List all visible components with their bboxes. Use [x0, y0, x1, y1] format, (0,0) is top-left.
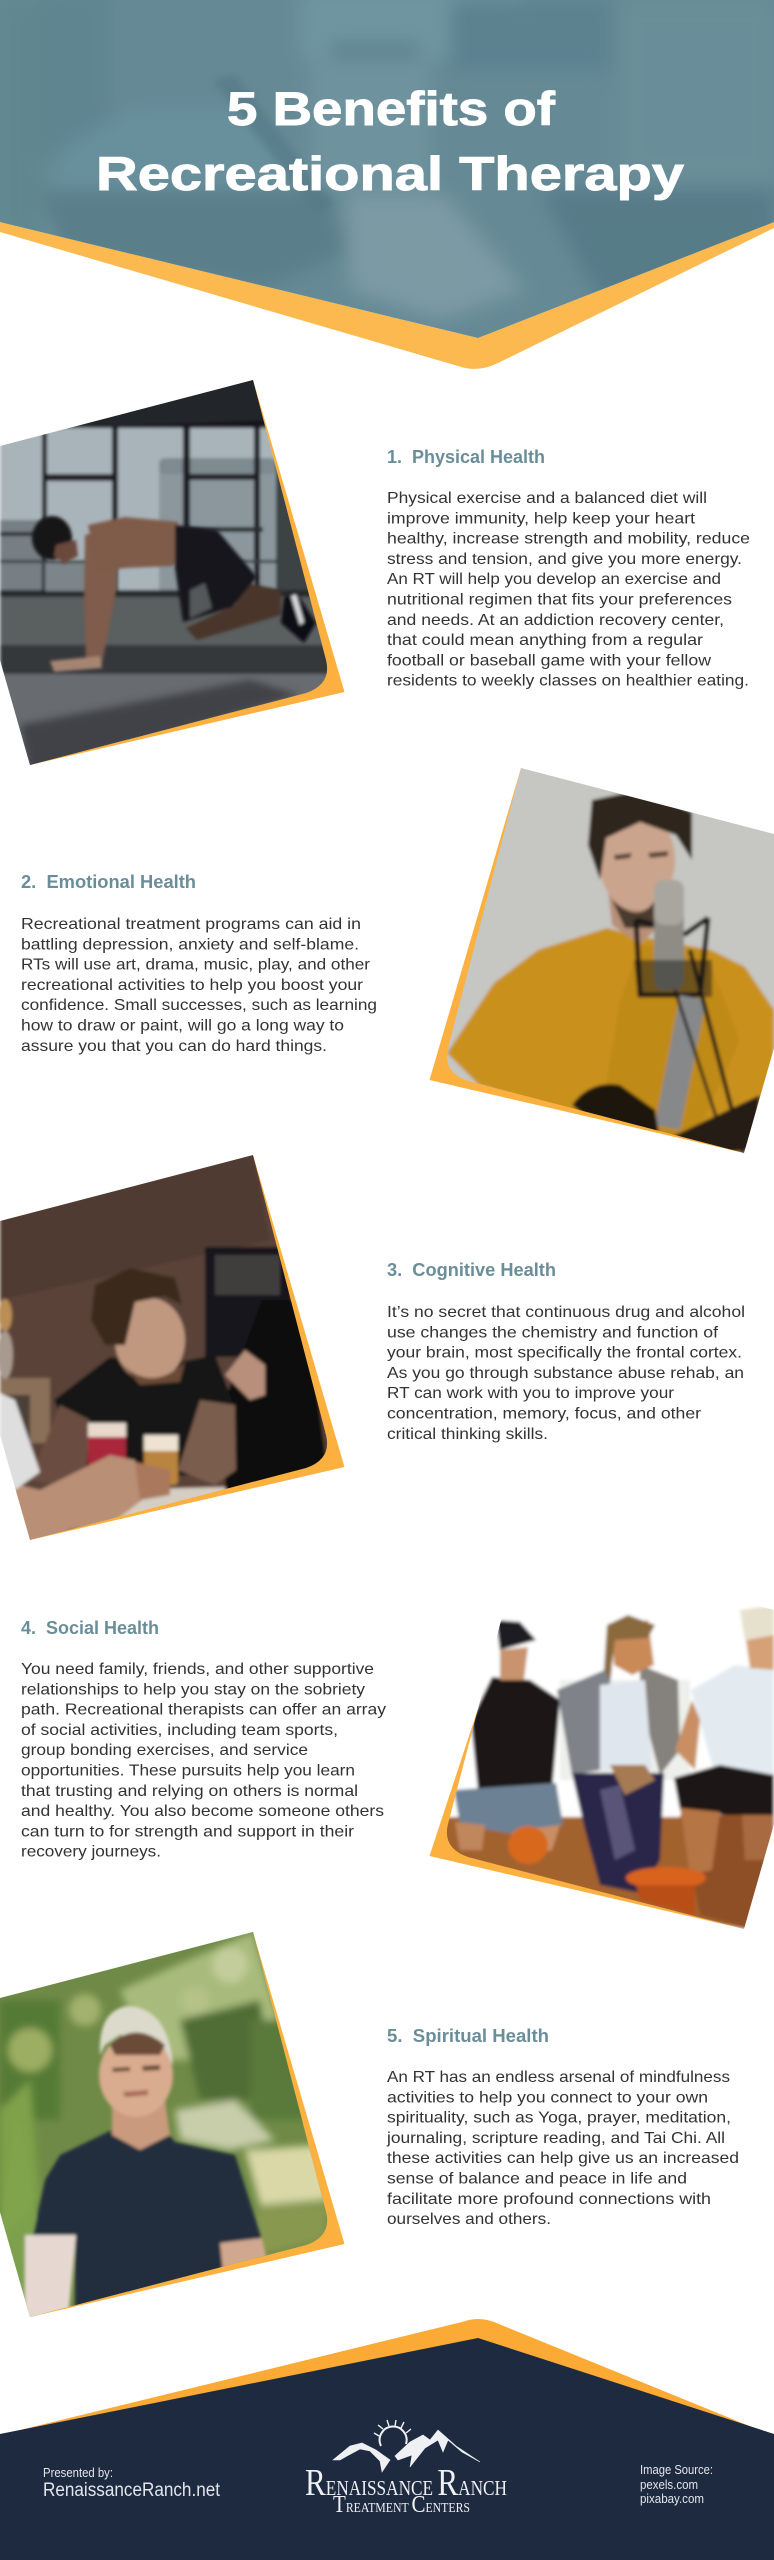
- text: cognitive health body: It’s no secret that continuous drug and alcohol: [387, 1304, 745, 1321]
- text: physical health body: Physical exercise and a balanced diet will: [387, 490, 707, 507]
- text: emotional health body: how to draw or paint, will go a long way to: [21, 1018, 344, 1034]
- footer orange chevron: [20, 2319, 774, 2436]
- text: spiritual health body: journaling, scripture reading, and Tai Chi. All: [386, 2130, 725, 2147]
- image sources: pixabay.com: [640, 2491, 704, 2506]
- header teal photo background: [0, 0, 774, 345]
- text: social health body: group bonding exercises, and service: [21, 1742, 308, 1759]
- heading: social health: 4. Social Health: [21, 1617, 159, 1638]
- text: emotional health body: RTs will use art, drama, music, play, and other: [21, 957, 370, 974]
- text: social health body: path. Recreational therapists can offer an array: [21, 1702, 386, 1719]
- logo: renaissance ranch treatment centers: RENAISSANCE RANCH: [305, 2462, 507, 2504]
- footer: [0, 2319, 774, 2560]
- text: cognitive health body: your brain, most specifically the frontal cortex.: [387, 1345, 742, 1362]
- text: social health body: relationships to help you stay on the sobriety: [21, 1681, 365, 1698]
- text: physical health body: football or baseball game with your fellow: [387, 652, 712, 669]
- heading: cognitive health: 3. Cognitive Health: [387, 1259, 556, 1280]
- icon: mountains and sun: [333, 2420, 480, 2472]
- image sources: Image Source:: [640, 2462, 713, 2477]
- text: spiritual health body: these activities can help give us an increased: [387, 2150, 739, 2167]
- photo: three friends sitting on a wall: [430, 1606, 774, 1929]
- text: emotional health body: assure you that you can do hard things.: [21, 1038, 327, 1055]
- section 1: physical health: [0, 370, 750, 775]
- heading: physical health: 1. Physical Health: [387, 446, 545, 467]
- section 2: emotional health: [21, 760, 774, 1160]
- text: emotional health body: [21, 916, 377, 1055]
- text: physical health body: An RT will help you develop an exercise and: [387, 571, 721, 588]
- text: physical health body: and needs. At an addiction recovery center,: [387, 612, 724, 629]
- presented by: Presented by:: [43, 2465, 113, 2480]
- photo: man exercising: [0, 370, 344, 775]
- title: [96, 82, 684, 200]
- text: physical health body: [387, 490, 750, 690]
- text: spiritual health body: [386, 2069, 739, 2228]
- text: physical health body: residents to weekly classes on healthier eating.: [387, 673, 749, 690]
- text: spiritual health body: An RT has an endless arsenal of mindfulness: [387, 2069, 730, 2086]
- text: cognitive health body: RT can work with you to improve your: [387, 1385, 674, 1402]
- text: spiritual health body: sense of balance and peace in life and: [387, 2170, 687, 2188]
- text: cognitive health body: use changes the chemistry and function of: [387, 1324, 719, 1341]
- text: social health body: and healthy. You also become someone others: [21, 1803, 384, 1820]
- heading: emotional health: 2. Emotional Health: [21, 871, 196, 892]
- section 5: spiritual health: [0, 1925, 739, 2325]
- text: physical health body: nutritional regimen that fits your preferences: [387, 592, 732, 608]
- text: emotional health body: Recreational treatment programs can aid in: [21, 916, 361, 933]
- section 4: social health: [21, 1606, 774, 1929]
- section 3: cognitive health: [0, 1150, 745, 1550]
- text: spiritual health body: spirituality, such as Yoga, prayer, meditation,: [387, 2110, 731, 2127]
- text: social health body: [21, 1661, 386, 1861]
- text: physical health body: stress and tension, and give you more energy.: [387, 551, 742, 568]
- text: physical health body: healthy, increase strength and mobility, reduce: [387, 531, 750, 548]
- title: 5 Benefits of: [227, 82, 555, 135]
- text: emotional health body: confidence. Small successes, such as learning: [21, 997, 377, 1014]
- title: Recreational Therapy: [96, 147, 684, 200]
- text: social health body: You need family, friends, and other supportive: [21, 1661, 374, 1678]
- text: emotional health body: recreational activities to help you boost your: [21, 977, 363, 994]
- presented by: RenaissanceRanch.net: [43, 2480, 221, 2501]
- text: social health body: recovery journeys.: [21, 1844, 161, 1861]
- header orange chevron: [0, 222, 774, 369]
- text: physical health body: improve immunity, help keep your heart: [387, 510, 696, 527]
- text: spiritual health body: facilitate more profound connections with: [387, 2191, 711, 2208]
- text: social health body: that trusting and relying on others is normal: [21, 1783, 358, 1800]
- text: social health body: can turn to for strength and support in their: [21, 1823, 354, 1840]
- text: cognitive health body: [387, 1304, 745, 1443]
- text: cognitive health body: critical thinking skills.: [387, 1426, 548, 1443]
- text: social health body: opportunities. These pursuits help you learn: [21, 1762, 355, 1780]
- logo: renaissance ranch treatment centers: TREATMENT CENTERS: [333, 2492, 470, 2518]
- image sources: [640, 2462, 713, 2506]
- text: spiritual health body: ourselves and others.: [387, 2211, 551, 2228]
- photo: man meditating outdoors: [0, 1925, 344, 2325]
- text: cognitive health body: concentration, memory, focus, and other: [387, 1406, 701, 1422]
- text: physical health body: that could mean anything from a regular: [387, 632, 703, 649]
- heading: spiritual health: 5. Spiritual Health: [387, 2025, 549, 2046]
- photo: man at a table with drinks: [0, 1150, 344, 1550]
- text: social health body: of social activities, including team sports,: [21, 1722, 338, 1739]
- footer navy panel: [0, 2338, 774, 2560]
- image sources: pexels.com: [640, 2477, 698, 2492]
- header banner: [0, 0, 774, 369]
- text: emotional health body: battling depression, anxiety and self-blame.: [21, 936, 359, 953]
- photo: man singing with guitar: [420, 760, 774, 1160]
- logo: renaissance ranch treatment centers: [305, 2420, 507, 2518]
- text: cognitive health body: As you go through substance abuse rehab, an: [387, 1365, 744, 1382]
- text: spiritual health body: activities to help you connect to your own: [387, 2089, 708, 2106]
- presented by: [43, 2465, 221, 2501]
